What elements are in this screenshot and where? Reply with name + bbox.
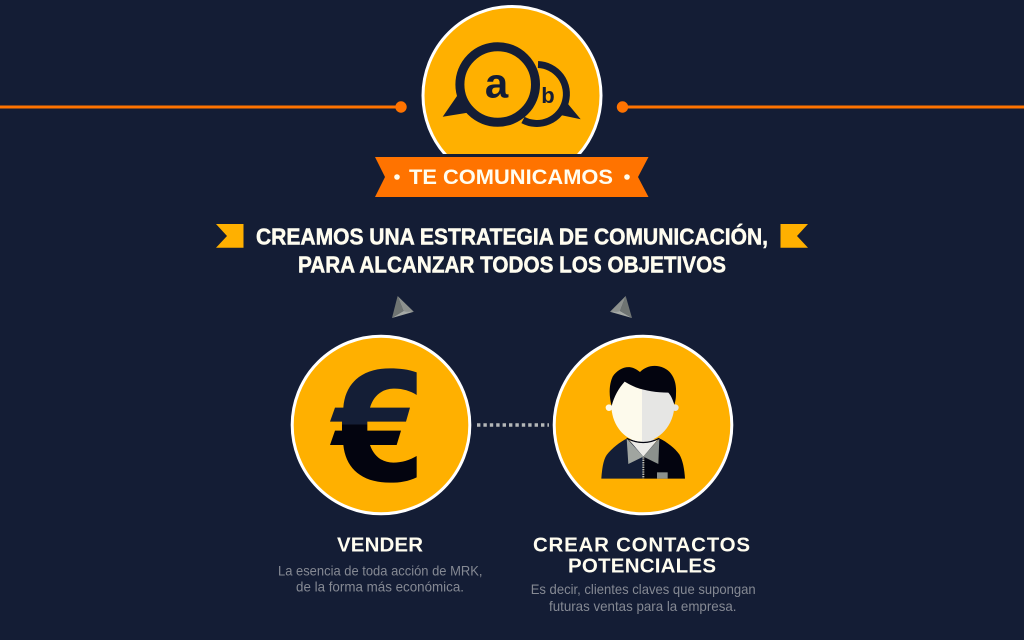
heading [256,222,768,278]
heading: crear contactos [533,534,750,578]
top circle badge [422,5,602,154]
pocket [657,472,668,479]
description: vender: La esencia de toda acción de MRK, [278,563,482,579]
panel: contactos circle [554,336,732,514]
shirt [629,439,658,457]
description: vender [278,563,482,595]
banner: te comunicamos: TE COMUNICAMOS [409,166,613,189]
right flag [780,224,808,248]
heading: CREAMOS UNA ESTRATEGIA DE COMUNICACIÓN, [256,222,768,250]
heading: vender: VENDER [337,534,423,556]
description: crear contactos [531,581,756,614]
face [611,373,674,442]
hair [610,366,676,406]
ears [606,404,679,411]
right connector line [617,101,1024,113]
icon: person [601,366,685,479]
dotted connector [477,423,549,427]
banner: te comunicamos [375,157,648,197]
bubble a: a [485,59,509,106]
body [601,438,685,479]
description: crear contactos: Es decir, clientes claves que supongan [531,581,756,597]
description: vender: de la forma más económica. [296,579,464,595]
description: crear contactos: futuras ventas para la empresa. [549,598,736,614]
arrow: right triangle [610,296,632,318]
left connector line [0,101,407,113]
left flag [216,224,244,248]
heading: crear contactos: POTENCIALES [568,554,716,578]
text: crear contactos [531,534,756,614]
text: vender [278,534,482,595]
icon: euro [330,368,417,483]
heading: PARA ALCANZAR TODOS LOS OBJETIVOS [298,252,726,278]
collar [627,438,659,464]
arrow: left triangle [392,296,414,318]
heading: crear contactos: CREAR CONTACTOS [533,534,750,556]
panel: vender circle [292,336,470,514]
zipper [640,457,646,479]
icon: speech bubbles [443,47,581,123]
bubble b: b [541,83,555,108]
neck shadow [627,438,659,442]
